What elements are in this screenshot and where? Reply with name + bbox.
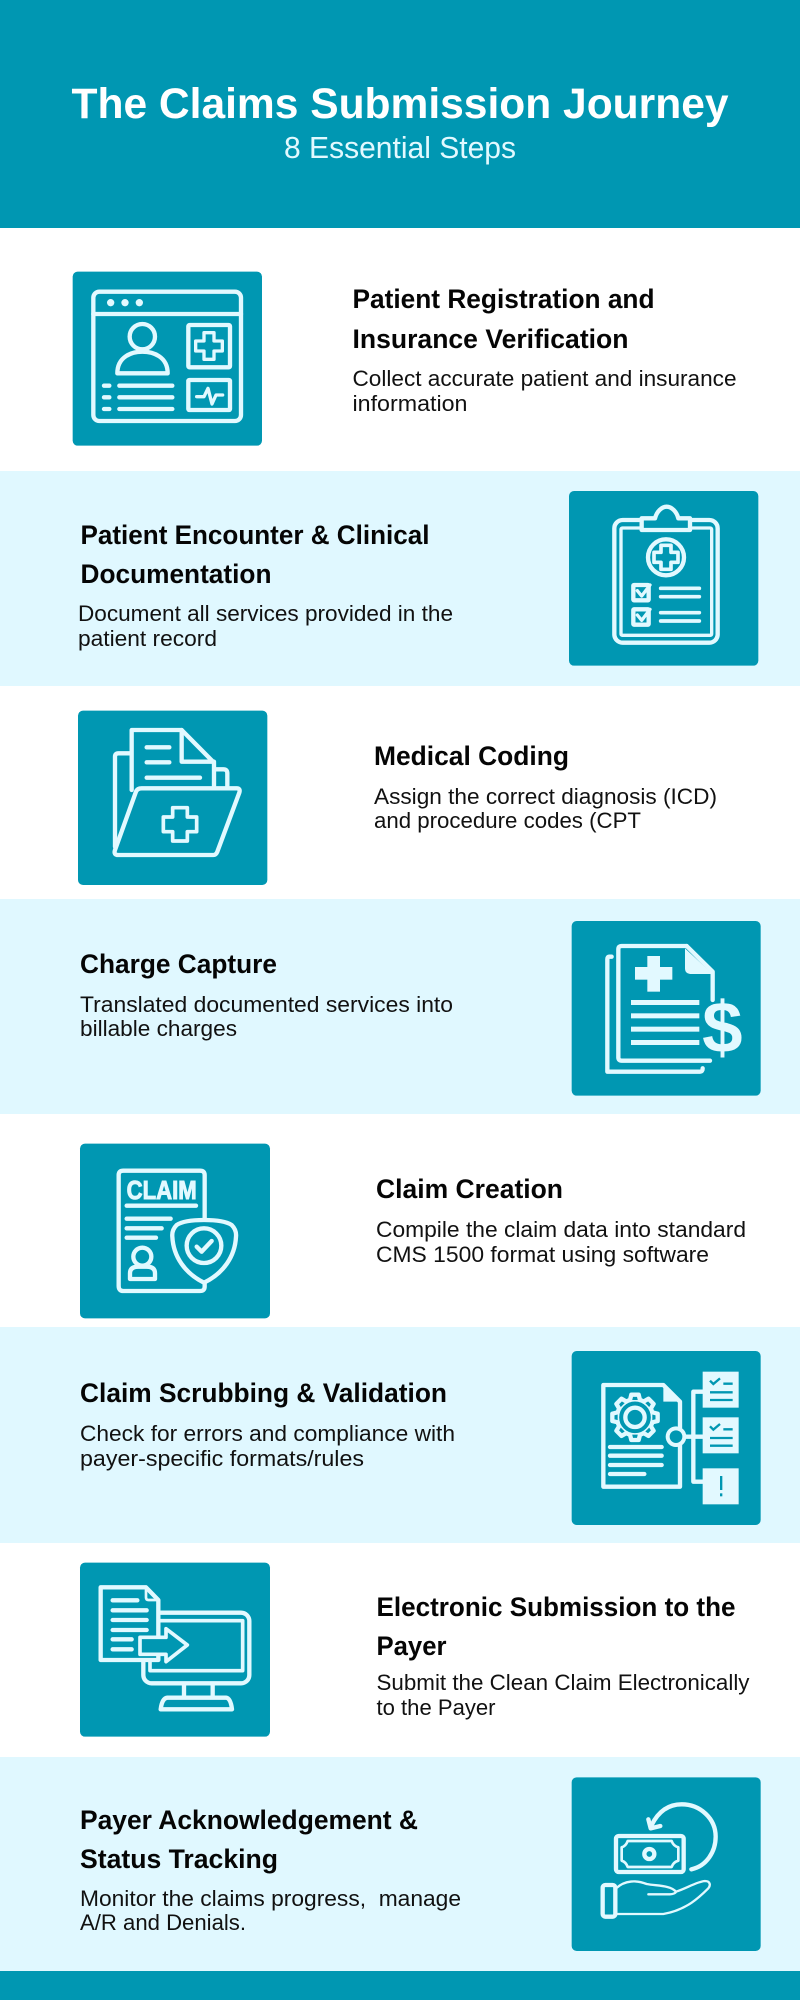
heading: Patient Registration and <box>352 284 654 314</box>
description: Monitor the claims progress, manage <box>80 1886 461 1911</box>
heading: Claim Scrubbing & Validation <box>80 1378 447 1408</box>
step 6: claim scrubbing <box>80 1351 761 1525</box>
heading: Payer Acknowledgement & <box>80 1805 418 1835</box>
icon: invoice with dollar sign <box>572 921 761 1096</box>
heading: Electronic Submission to the <box>376 1592 736 1622</box>
step 1: patient registration <box>73 272 736 446</box>
heading: Documentation <box>80 559 272 589</box>
subtitle: 8 Essential Steps <box>284 130 516 165</box>
icon: claim form with shield <box>80 1144 270 1318</box>
description: Submit the Clean Claim Electronically <box>376 1670 750 1695</box>
header banner <box>0 0 800 228</box>
description: Collect accurate patient and insurance <box>352 366 736 391</box>
heading: Claim Creation <box>376 1174 563 1204</box>
description: Assign the correct diagnosis (ICD) <box>374 784 717 809</box>
description: CMS 1500 format using software <box>376 1242 709 1267</box>
heading: Insurance Verification <box>352 324 628 354</box>
heading: Patient Encounter & Clinical <box>80 520 430 550</box>
description: Document all services provided in the <box>78 601 453 626</box>
description: to the Payer <box>376 1695 496 1720</box>
icon: hand with money <box>572 1777 761 1951</box>
icon: document validation <box>572 1351 761 1525</box>
description: patient record <box>78 626 217 651</box>
icon: medical folder <box>78 711 267 885</box>
step 7: electronic submission <box>80 1563 750 1737</box>
description: Compile the claim data into standard <box>376 1217 746 1242</box>
heading: Medical Coding <box>374 741 569 771</box>
icon: document to monitor <box>80 1563 270 1737</box>
step 2: patient encounter <box>78 491 758 666</box>
description: and procedure codes (CPT <box>374 808 641 833</box>
dollar sign: $ <box>702 987 743 1068</box>
description: A/R and Denials. <box>80 1910 246 1935</box>
heading: Charge Capture <box>80 949 277 979</box>
heading: Payer <box>376 1631 447 1661</box>
step 4: charge capture <box>80 921 761 1096</box>
icon: patient record window <box>73 272 262 446</box>
description: Check for errors and compliance with <box>80 1421 455 1446</box>
description: Translated documented services into <box>80 992 453 1017</box>
title: The Claims Submission Journey <box>72 80 729 128</box>
heading: Status Tracking <box>80 1844 278 1874</box>
description: payer-specific formats/rules <box>80 1446 364 1471</box>
icon: clipboard <box>569 491 758 666</box>
description: billable charges <box>80 1016 237 1041</box>
claim label: CLAIM <box>127 1175 197 1205</box>
step 8: payer acknowledgement <box>80 1777 761 1951</box>
description: information <box>352 391 468 416</box>
step 5: claim creation <box>80 1144 746 1318</box>
step 3: medical coding <box>78 711 717 885</box>
